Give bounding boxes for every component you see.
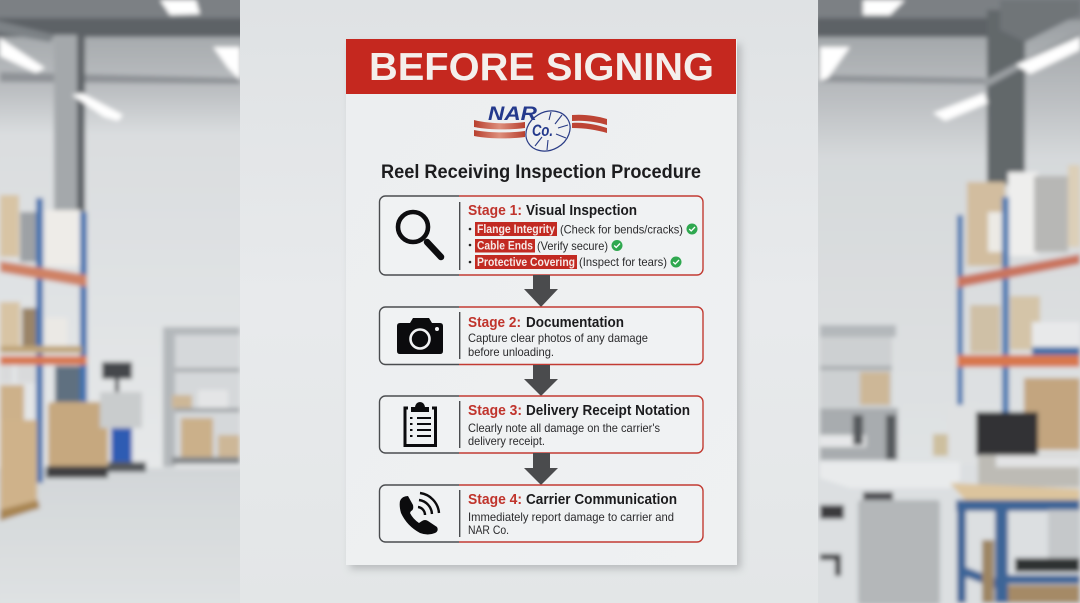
stage 1 card: [380, 196, 703, 275]
sign shadow: [350, 44, 741, 569]
stage 1 heading: Stage 1:: [468, 203, 522, 219]
checklist item: protective covering: Protective Covering: [477, 257, 575, 269]
stage 2 heading: Stage 2:: [468, 315, 521, 331]
wall pillar behind the sign: [240, 0, 818, 603]
checklist item: cable ends: Cable Ends: [477, 240, 533, 252]
NAR Co logo: NAR: [488, 104, 537, 125]
sign board: [346, 39, 737, 565]
arrow: stage 1 to stage 2: [524, 275, 558, 307]
stage 4 card: [380, 485, 703, 542]
stage 1 heading: [468, 203, 637, 219]
stage 4 description: NAR Co.: [468, 523, 509, 537]
stage 2 heading: [468, 315, 624, 331]
stage 1 heading: Visual Inspection: [526, 203, 637, 219]
icon: camera: [397, 318, 443, 354]
stage 4 description: [468, 510, 674, 537]
stage 4 description: Immediately report damage to carrier and: [468, 510, 674, 524]
checklist item: protective covering: [469, 255, 682, 269]
procedure title: Reel Receiving Inspection Procedure: [381, 162, 701, 183]
stage 2 description: [468, 331, 648, 359]
stage 3 heading: Delivery Receipt Notation: [526, 403, 690, 419]
stage 3 description: [468, 421, 660, 448]
stage 4 heading: [468, 492, 677, 508]
stage 3 description: delivery receipt.: [468, 434, 545, 448]
checklist item: cable ends: [469, 239, 622, 253]
checklist item: protective covering: (Inspect for tears): [579, 255, 667, 269]
checklist item: flange integrity: (Check for bends/cracks): [560, 222, 683, 236]
warehouse background: right side: [815, 0, 1080, 603]
arrow: stage 2 to stage 3: [524, 365, 558, 396]
arrow: stage 3 to stage 4: [524, 453, 558, 485]
banner heading: BEFORE SIGNING: [369, 46, 714, 89]
checklist item: flange integrity: [469, 222, 698, 236]
stage 3 card: [380, 396, 703, 453]
NAR Co logo: [474, 103, 607, 159]
stage 3 description: Clearly note all damage on the carrier's: [468, 421, 660, 435]
stage 2 card: [380, 307, 703, 364]
icon: phone with signal: [400, 493, 439, 534]
icon: clipboard: [405, 402, 436, 446]
checklist item: flange integrity: Flange Integrity: [477, 224, 556, 236]
stage 2 description: before unloading.: [468, 345, 554, 359]
stage 2 heading: Documentation: [526, 315, 624, 331]
sign panel: [346, 39, 737, 565]
stage 2 description: Capture clear photos of any damage: [468, 331, 648, 345]
icon: magnifying glass: [398, 212, 441, 257]
stage 4 heading: Carrier Communication: [526, 492, 677, 508]
header banner: [346, 39, 736, 94]
stage 3 heading: Stage 3:: [468, 403, 522, 419]
warehouse background: left side: [0, 0, 245, 603]
checklist item: cable ends: (Verify secure): [537, 239, 608, 253]
stage 4 heading: Stage 4:: [468, 492, 522, 508]
NAR Co logo: Co.: [532, 121, 553, 140]
